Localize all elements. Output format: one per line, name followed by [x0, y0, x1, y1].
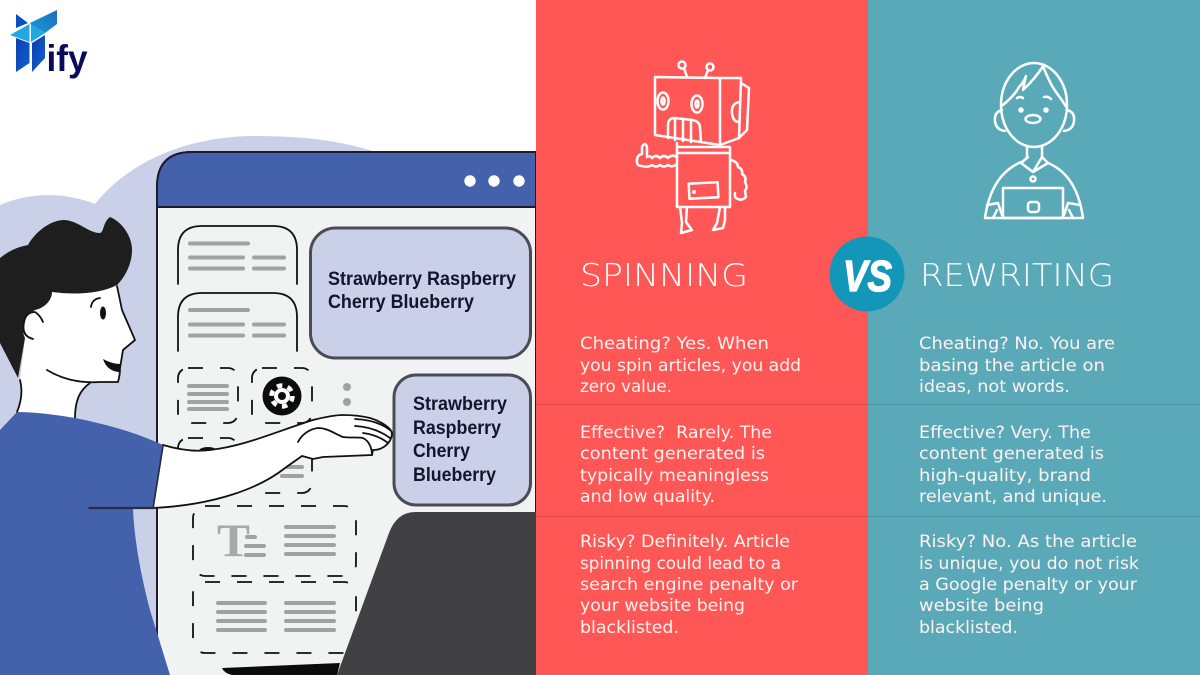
- text: spinning effectiveness: [580, 423, 772, 506]
- arm: [153, 415, 392, 508]
- window control dots: [464, 175, 525, 187]
- browser window: [157, 152, 536, 675]
- person: [0, 217, 392, 675]
- icon: robot: [637, 62, 749, 233]
- text: spinning effectiveness: and low quality.: [580, 487, 715, 506]
- lavender text box: narrow: [394, 375, 530, 505]
- text: spinning risk: blacklisted.: [580, 618, 679, 637]
- hair: [0, 217, 132, 378]
- lavender text box: narrow: Strawberry: [413, 393, 507, 415]
- lavender text box: narrow: Cherry: [413, 440, 470, 462]
- text: spinning risk: Risky? Definitely. Article: [580, 532, 790, 551]
- panel: rewriting: [868, 0, 1200, 675]
- shirt: [0, 412, 170, 675]
- text: spinning effectiveness: content generated is: [580, 444, 765, 463]
- lavender text box: narrow: Raspberry: [413, 417, 501, 439]
- VS badge: [830, 236, 904, 312]
- text: rewriting cheating: [919, 334, 1115, 396]
- content card 1: [178, 226, 297, 284]
- text: rewriting effectiveness: Effective? Very. The: [919, 423, 1091, 442]
- content card 2: [178, 293, 297, 351]
- dashed blocks under arm: [178, 438, 312, 493]
- text: spinning cheating: [580, 334, 801, 396]
- heading: spinning: SPINNING: [580, 258, 748, 294]
- text: spinning effectiveness: Effective? Rarely. The: [580, 423, 772, 442]
- neck and face: [17, 285, 135, 418]
- dashed block with two text columns: [193, 582, 356, 653]
- dashed block with gear icon: [252, 368, 312, 423]
- text: rewriting risk: is unique, you do not risk: [919, 554, 1139, 573]
- lavender text box: narrow: Blueberry: [413, 464, 496, 486]
- text: rewriting effectiveness: content generated is: [919, 444, 1104, 463]
- text: spinning risk: [580, 532, 798, 637]
- laptop back: [337, 512, 536, 675]
- text: rewriting effectiveness: high-quality, brand: [919, 466, 1091, 485]
- text: rewriting risk: a Google penalty or your: [919, 575, 1137, 594]
- text: spinning risk: search engine penalty or: [580, 575, 798, 594]
- lavender text box: wide: [310, 228, 530, 358]
- text: rewriting cheating: ideas, not words.: [919, 377, 1070, 396]
- sleeve hem: [88, 507, 155, 509]
- logo wordmark: ify: [46, 38, 88, 79]
- logo: [10, 10, 88, 79]
- eye and brow: [100, 306, 106, 320]
- mouth: [103, 359, 121, 372]
- lavender text box: wide: Strawberry Raspberry: [328, 268, 516, 290]
- text: spinning cheating: zero value.: [580, 377, 672, 396]
- lavender blob backdrop: [0, 136, 375, 675]
- VS badge: VS: [843, 252, 892, 301]
- text: rewriting cheating: basing the article on: [919, 356, 1105, 375]
- icon: person with laptop: [985, 63, 1083, 218]
- text: rewriting risk: blacklisted.: [919, 618, 1018, 637]
- illustration: person at browser window: [0, 136, 536, 675]
- text: spinning risk: spinning could lead to a: [580, 554, 781, 573]
- text: rewriting effectiveness: [919, 423, 1107, 506]
- text: spinning cheating: Cheating? Yes. When: [580, 334, 769, 353]
- lavender text box: wide: Cherry Blueberry: [328, 291, 474, 313]
- text: rewriting effectiveness: relevant, and unique.: [919, 487, 1107, 506]
- dashed block with T icon: [193, 506, 356, 576]
- text: rewriting risk: Risky? No. As the article: [919, 532, 1137, 551]
- logo mark: [10, 10, 57, 72]
- text: rewriting risk: website being: [919, 596, 1044, 615]
- dashed block with T icon: T: [217, 515, 250, 567]
- laptop base shadow: [222, 663, 340, 675]
- text: spinning effectiveness: typically meaningless: [580, 466, 769, 485]
- dashed block with text lines: [178, 368, 238, 423]
- text: spinning risk: your website being: [580, 596, 745, 615]
- text: rewriting risk: [919, 532, 1139, 637]
- face outline: [17, 286, 135, 418]
- ear: [23, 312, 43, 339]
- text: rewriting cheating: Cheating? No. You are: [919, 334, 1115, 353]
- text: spinning cheating: you spin articles, you add: [580, 356, 801, 375]
- panel: spinning: [536, 0, 868, 675]
- heading: rewriting: REWRITING: [920, 258, 1114, 294]
- hand details: [298, 419, 390, 455]
- row dividers: [536, 404, 1200, 516]
- menu dots: [343, 383, 351, 406]
- browser title bar: [157, 152, 536, 207]
